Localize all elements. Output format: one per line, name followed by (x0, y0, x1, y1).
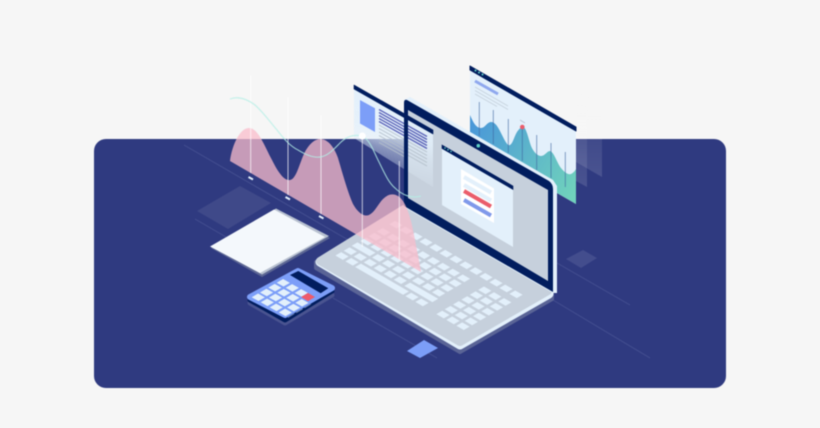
calculator shadow (250, 275, 332, 323)
screen gray panel (407, 106, 549, 284)
calculator side (250, 272, 332, 320)
form field lines (464, 177, 491, 200)
chart vertical lines (251, 75, 399, 260)
trend marker (359, 132, 366, 140)
peak label (520, 120, 525, 123)
small tile on right of floor (566, 250, 597, 268)
calculator (250, 271, 332, 323)
laptop base shadow (316, 262, 552, 352)
window header (470, 66, 576, 131)
screen outer light edge (404, 97, 557, 293)
calculator keys (255, 281, 316, 316)
purple text lines (379, 110, 427, 148)
axis tick labels (248, 177, 324, 218)
window body (442, 145, 513, 247)
blue form bar (464, 200, 491, 216)
image placeholder (360, 100, 375, 132)
laptop base edge (320, 212, 549, 345)
keyboard (338, 222, 521, 328)
pink area chart (230, 128, 421, 272)
floating text page (354, 85, 433, 187)
page header (354, 85, 433, 134)
numeric pad (439, 288, 509, 328)
illustration: isometric laptop with floating charts (93, 64, 727, 389)
laptop screen dark frame (404, 100, 553, 292)
chart title lines (475, 81, 508, 110)
main key rows (338, 223, 520, 328)
teal trend curve (230, 98, 421, 197)
calculator red key (302, 294, 314, 300)
white form card (461, 169, 494, 223)
window header (442, 145, 513, 190)
ghost tile on floor (197, 186, 271, 229)
on-screen window (442, 145, 513, 247)
wide keys (338, 244, 444, 305)
calculator body (250, 271, 332, 315)
notebook pages edge (214, 208, 329, 274)
gray text lines (379, 125, 427, 166)
floating chart window (470, 66, 576, 204)
notebook shadow (211, 209, 330, 277)
blue tile on floor (407, 340, 438, 358)
peak marker (520, 125, 525, 129)
calculator display (290, 271, 328, 293)
red form bar (464, 191, 491, 206)
header dots (444, 147, 452, 152)
floor guide lines (184, 145, 650, 358)
page body (354, 85, 433, 187)
notebook top (210, 210, 325, 273)
header dots (474, 70, 484, 76)
window body (470, 66, 576, 204)
laptop (316, 97, 557, 352)
panel: navy background (94, 139, 726, 388)
ghost panels behind chart window (576, 90, 602, 187)
paper notebook (210, 208, 330, 277)
blue area chart (470, 115, 576, 204)
webcam (476, 144, 480, 148)
laptop base top (320, 209, 548, 342)
chart gridlines (479, 102, 565, 187)
